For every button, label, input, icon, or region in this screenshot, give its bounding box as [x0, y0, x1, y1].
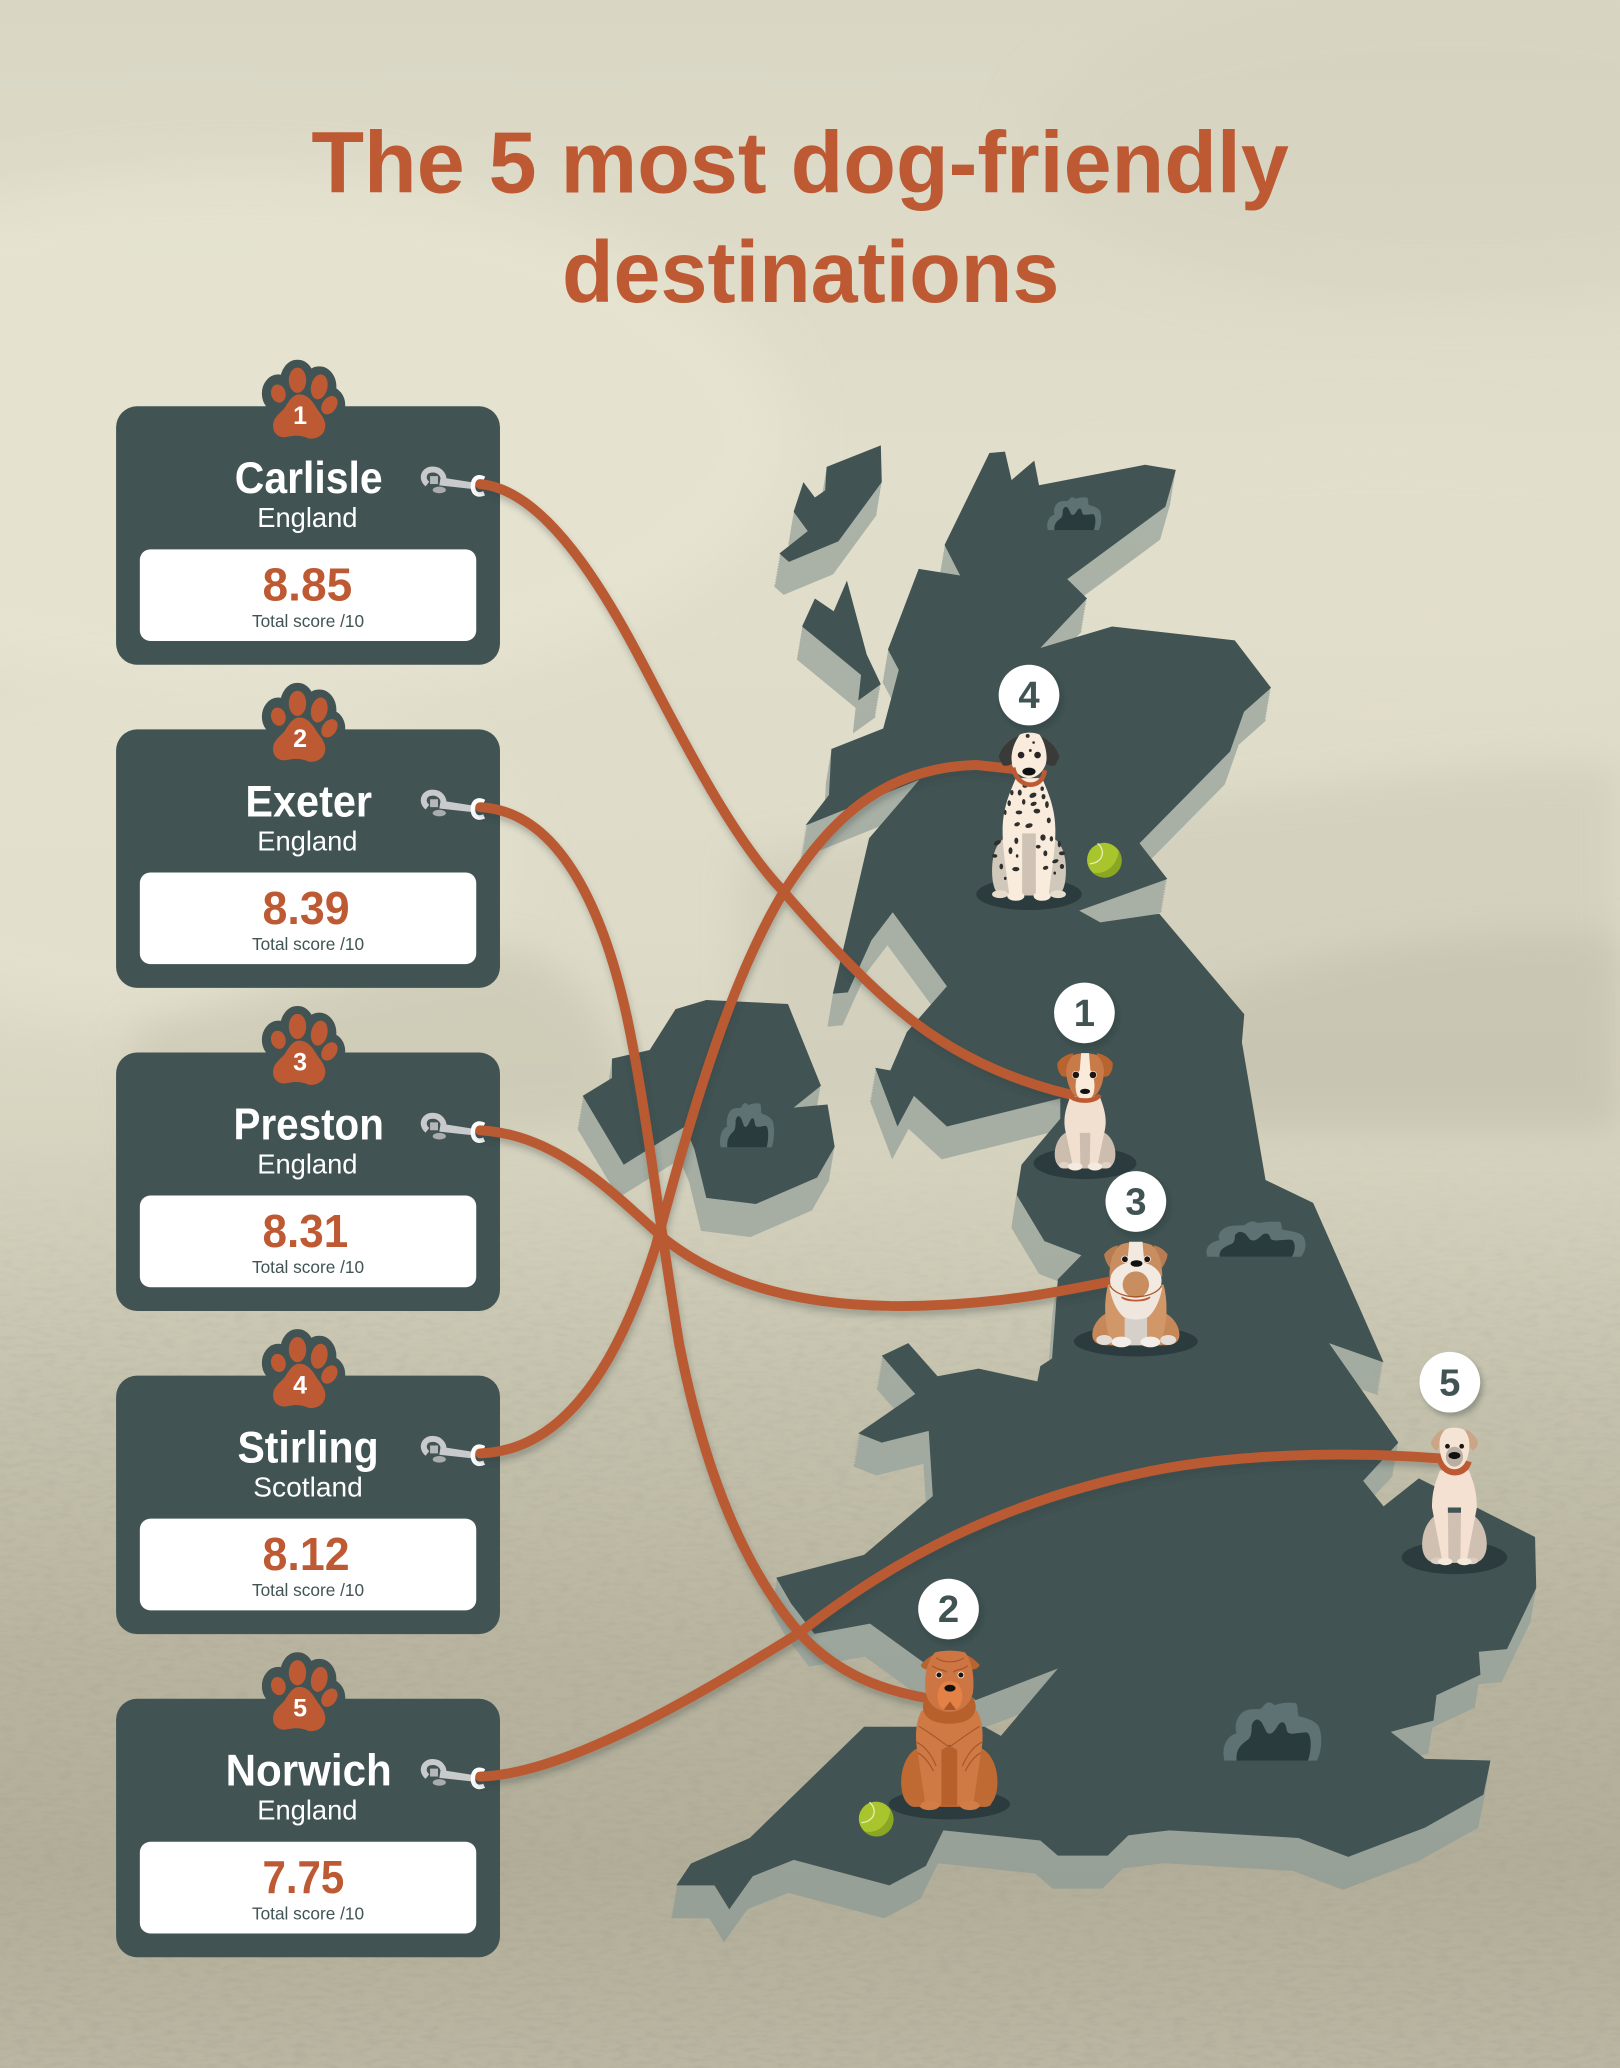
leads connecting cards to dogs — [480, 484, 1445, 1777]
card 2: Exeter — [116, 690, 500, 988]
country: England — [257, 1148, 358, 1179]
score box: Total score /10 — [252, 934, 364, 954]
rank paw 5: 5 — [293, 1695, 307, 1723]
icon: mountains, southern England — [1223, 1702, 1321, 1761]
score box: 8.31 — [263, 1205, 348, 1257]
score box: 8.12 — [263, 1528, 350, 1580]
icon: mountains, Scottish Highlands — [1047, 497, 1101, 530]
score box: Total score /10 — [252, 1903, 364, 1923]
title — [311, 115, 1289, 321]
map marker 1 — [1054, 983, 1115, 1043]
icon: lead clip — [424, 470, 484, 494]
map marker 2 — [918, 1579, 979, 1639]
lead: Exeter — [480, 807, 930, 1699]
score box: 7.75 — [263, 1851, 344, 1903]
rank paw 5 — [268, 1659, 341, 1731]
map marker 4: 4 — [1018, 674, 1040, 717]
country: England — [257, 825, 358, 856]
dog 3: bulldog — [1074, 1242, 1198, 1356]
map marker 4 — [999, 665, 1059, 725]
destination name: Exeter — [245, 775, 372, 826]
icon: mountains, Northern Ireland — [720, 1103, 774, 1147]
rank paw 1: 1 — [293, 402, 307, 430]
card 1: Carlisle — [116, 366, 500, 665]
destination name: Preston — [234, 1099, 384, 1150]
icon: lead clip — [424, 793, 484, 817]
icon: mountains, Yorkshire — [1206, 1221, 1305, 1257]
country: England — [257, 502, 358, 533]
dog 2: shar-pei — [889, 1651, 1010, 1819]
icon: lead clip — [424, 1762, 484, 1787]
destination name: Carlisle — [235, 452, 383, 503]
rank paw 2: 2 — [293, 725, 307, 753]
map of the UK and Northern Ireland — [577, 445, 1536, 1942]
score box: 8.85 — [263, 559, 352, 611]
title: destinations — [562, 224, 1059, 321]
rank paw 4: 4 — [293, 1371, 307, 1399]
dog 5: labrador — [1402, 1428, 1507, 1574]
map marker 5: 5 — [1439, 1361, 1460, 1404]
country: England — [257, 1795, 358, 1826]
destination name: Stirling — [237, 1422, 379, 1473]
lead: Stirling — [480, 765, 1013, 1453]
map marker 2: 2 — [938, 1588, 959, 1631]
card 5: Norwich — [116, 1659, 500, 1957]
country: Scotland — [253, 1472, 363, 1503]
map marker 3 — [1106, 1171, 1166, 1232]
score box — [140, 872, 476, 964]
score box: Total score /10 — [252, 611, 364, 631]
icon: lead clip — [424, 1439, 484, 1464]
lead: Preston — [480, 1130, 1115, 1306]
tennis ball, Scotland — [1087, 843, 1122, 878]
rank paw 3 — [268, 1013, 341, 1085]
destination name: Norwich — [226, 1745, 392, 1796]
map marker 3: 3 — [1125, 1181, 1146, 1224]
rank paw 3: 3 — [293, 1048, 307, 1076]
card 4: Stirling — [116, 1336, 500, 1634]
score box — [140, 1519, 476, 1610]
icon: lead clip — [424, 1116, 484, 1141]
lead: Norwich — [480, 1455, 1445, 1777]
dog 1: jack russell — [1034, 1053, 1137, 1179]
score box: Total score /10 — [252, 1257, 364, 1277]
score box: 8.39 — [263, 882, 350, 934]
rank paw 2 — [268, 690, 341, 762]
map marker 5 — [1419, 1352, 1480, 1413]
rank paw 1 — [268, 366, 341, 439]
rank paw 4 — [268, 1336, 341, 1408]
tennis ball, Cornwall — [859, 1802, 894, 1837]
title: The 5 most dog-friendly — [311, 115, 1289, 212]
score box — [140, 1196, 476, 1287]
card 3: Preston — [116, 1013, 500, 1311]
map marker 1: 1 — [1074, 992, 1095, 1035]
score box: Total score /10 — [252, 1580, 364, 1600]
score box — [140, 1842, 476, 1933]
dog 4: dalmatian — [976, 733, 1082, 910]
lead: Carlisle — [480, 484, 1071, 1095]
score box — [140, 549, 476, 641]
